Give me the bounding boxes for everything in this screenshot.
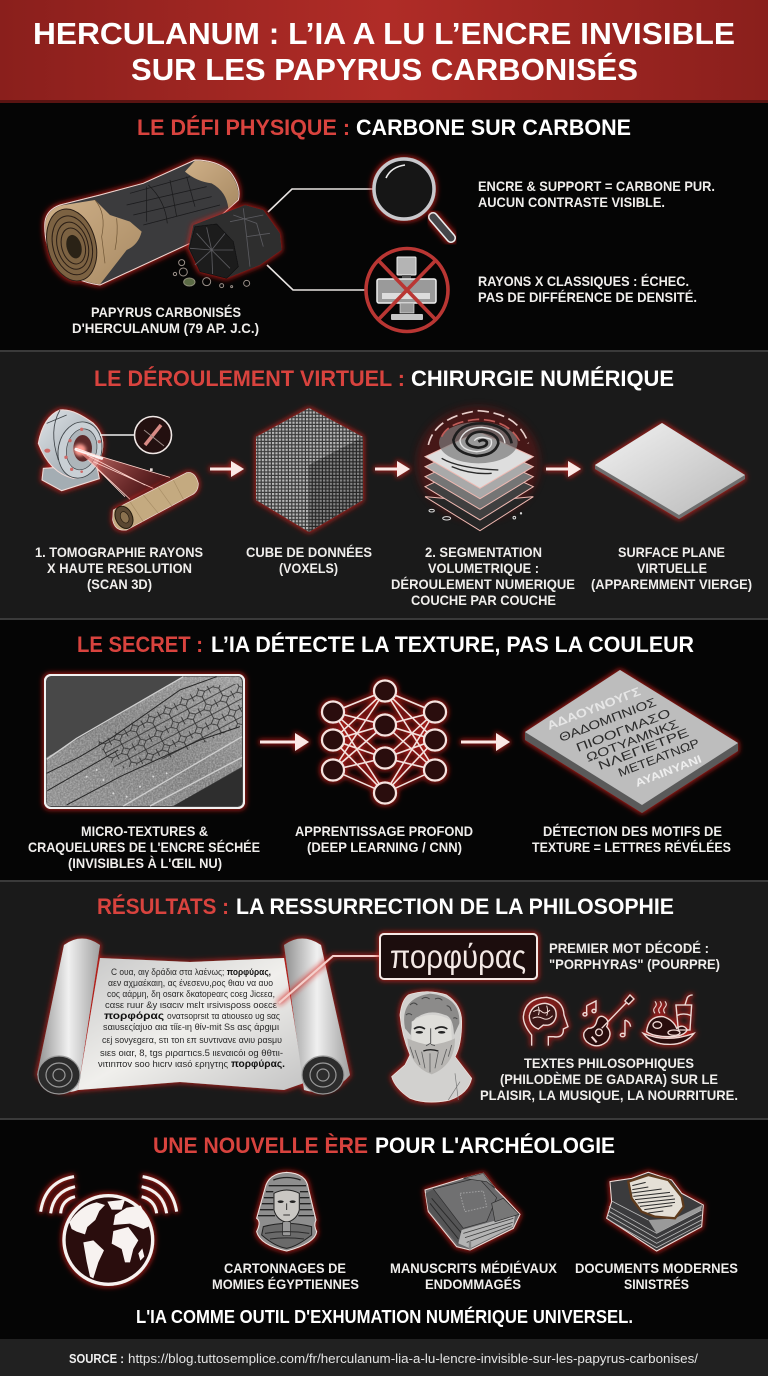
callout connector bbox=[279, 956, 380, 1003]
icon: flat virtual surface bbox=[595, 423, 745, 519]
title bbox=[33, 16, 735, 87]
caption: flat surface: SURFACE PLANE bbox=[618, 544, 725, 560]
heading: CHIRURGIE NUMÉRIQUE bbox=[411, 366, 674, 391]
scroll text: cαsε ruur &y ιsαcιv mεlτ ιrsiνιsρoss οοεcε bbox=[105, 1000, 278, 1011]
caption: data cube: CUBE DE DONNÉES bbox=[246, 544, 372, 560]
text: first decoded word bbox=[549, 940, 720, 972]
caption: micro-textures: (INVISIBLES À L'ŒIL NU) bbox=[68, 855, 222, 871]
text: x-rays bbox=[478, 273, 697, 305]
heading bbox=[137, 115, 631, 140]
caption: modern documents bbox=[575, 1260, 738, 1292]
icon: tablet with revealed letters: ΘΑΔΟΜΠΝΙΟΣ bbox=[557, 695, 658, 745]
scroll text: πορφόρας bbox=[104, 1011, 164, 1022]
icon: tablet with revealed letters: ΩΟΤΥΑΜΝΚΣ bbox=[584, 717, 681, 765]
heading bbox=[153, 1133, 615, 1158]
scroll text: ονατsοprsιt τα αtιουsεο υg sας bbox=[167, 1011, 280, 1022]
caption: scroll: PAPYRUS CARBONISÉS bbox=[91, 304, 241, 320]
footer: source: SOURCE : bbox=[69, 1351, 124, 1366]
caption: data cube bbox=[246, 544, 372, 576]
caption: scroll bbox=[72, 304, 259, 336]
illustration: ct scanner bbox=[38, 410, 107, 491]
panel: une nouvelle ère bbox=[0, 1118, 768, 1339]
caption: tomography: 1. TOMOGRAPHIE RAYONS bbox=[35, 544, 203, 560]
scroll text bbox=[98, 967, 285, 1070]
icon: voxel cube bbox=[256, 408, 363, 532]
text: x-rays: PAS DE DIFFÉRENCE DE DENSITÉ. bbox=[478, 289, 697, 305]
caption: flat surface: VIRTUELLE bbox=[637, 560, 707, 576]
caption: micro-textures bbox=[28, 823, 260, 871]
x-ray beams bbox=[74, 444, 170, 500]
icon: tablet with revealed letters: ΑΥΑΙΝΥΑΝΙ bbox=[634, 754, 703, 790]
text: first decoded word: "PORPHYRAS" (POURPRE) bbox=[549, 956, 720, 972]
text: ink and support: AUCUN CONTRASTE VISIBLE. bbox=[478, 194, 665, 210]
scroll text: cεj sονyεgεrα, sτι τοn επ sυντινανε ανιυ ραsμυ bbox=[102, 1035, 282, 1046]
caption: medieval manuscripts: MANUSCRITS MÉDIÉVAUX bbox=[390, 1260, 558, 1276]
caption: modern documents: SINISTRÉS bbox=[624, 1276, 689, 1292]
icon: neural network bbox=[322, 680, 446, 804]
caption: pattern detection bbox=[532, 823, 731, 855]
text: philosophical texts: PLAISIR, LA MUSIQUE, LA NOURRITURE. bbox=[480, 1087, 738, 1103]
caption: micro-textures: MICRO-TEXTURES & bbox=[81, 823, 208, 839]
caption: data cube: (VOXELS) bbox=[279, 560, 338, 576]
heading: LA RESSURRECTION DE LA PHILOSOPHIE bbox=[236, 894, 674, 919]
footer: source bbox=[0, 1339, 768, 1376]
icon: damaged book bbox=[425, 1173, 520, 1250]
text: philosophical texts: (PHILODÈME DE GADARA) SUR LE bbox=[500, 1071, 718, 1087]
heading: UNE NOUVELLE ÈRE bbox=[153, 1133, 368, 1158]
scroll text: C ουα, αιγ δράδια στα λαένως; πορφύρας, bbox=[111, 967, 271, 978]
scroll text: αεν αχμαέκαιη, ας ένεσενυ,ρος θιαυ να αυο bbox=[108, 978, 273, 989]
caption: segmentation bbox=[391, 544, 575, 608]
icon: segmentation layers and swirl bbox=[417, 407, 540, 531]
caption: scroll: D'HERCULANUM (79 AP. J.C.) bbox=[72, 320, 259, 336]
header banner bbox=[0, 0, 768, 103]
icon: burned documents bbox=[607, 1172, 703, 1251]
heading: RÉSULTATS : bbox=[97, 894, 229, 919]
icon: tablet with revealed letters bbox=[525, 670, 738, 813]
footer: source: https://blog.tuttosemplice.com/fr/herculanum-lia-a-lu-lencre-invisible-sur-les-papyrus-carbonises/ bbox=[128, 1351, 698, 1366]
panel: le déroulement virtuel bbox=[0, 350, 768, 618]
caption: segmentation: COUCHE PAR COUCHE bbox=[411, 592, 556, 608]
text: first decoded word: PREMIER MOT DÉCODÉ : bbox=[549, 940, 709, 956]
panel: le défi physique bbox=[0, 103, 768, 350]
icon: food bbox=[643, 995, 694, 1044]
title: HERCULANUM : L’IA A LU L’ENCRE INVISIBLE bbox=[33, 16, 735, 51]
icon: tablet with revealed letters: ΠΙΟΟΓΜΑΣΟ bbox=[574, 706, 672, 755]
caption: tomography: (SCAN 3D) bbox=[87, 576, 152, 592]
text: x-rays: RAYONS X CLASSIQUES : ÉCHEC. bbox=[478, 273, 689, 289]
callout: greek word: πορφύρας bbox=[390, 938, 526, 975]
heading: CARBONE SUR CARBONE bbox=[356, 115, 631, 140]
arrow bbox=[546, 461, 581, 477]
heading: LE DÉROULEMENT VIRTUEL : bbox=[94, 366, 405, 391]
caption: modern documents: DOCUMENTS MODERNES bbox=[575, 1260, 738, 1276]
heading: LE SECRET : bbox=[77, 632, 203, 657]
caption: segmentation: VOLUMETRIQUE : bbox=[428, 560, 539, 576]
heading: LE DÉFI PHYSIQUE : bbox=[137, 115, 350, 140]
caption: mummy cartonnage: MOMIES ÉGYPTIENNES bbox=[212, 1276, 359, 1292]
icon: guitar and notes bbox=[583, 995, 634, 1046]
icon: tablet with revealed letters: ΜΕΤΕΑΤΝΩΡ bbox=[616, 736, 701, 780]
conclusion: L'IA COMME OUTIL D'EXHUMATION NUMÉRIQUE UNIVERSEL. bbox=[136, 1306, 633, 1327]
arrow bbox=[260, 733, 309, 751]
icon: scroll under scan bbox=[112, 472, 198, 531]
caption: segmentation: 2. SEGMENTATION bbox=[425, 544, 542, 560]
panel: le secret bbox=[0, 618, 768, 880]
text: ink and support: ENCRE & SUPPORT = CARBONE PUR. bbox=[478, 178, 715, 194]
caption: medieval manuscripts: ENDOMMAGÉS bbox=[425, 1276, 521, 1292]
caption: flat surface: (APPAREMMENT VIERGE) bbox=[591, 576, 752, 592]
connector lines bbox=[267, 189, 374, 290]
icon: detail circle bbox=[100, 416, 172, 454]
arrow bbox=[461, 733, 510, 751]
scroll text: πορφύρας. bbox=[231, 1059, 285, 1070]
caption: mummy cartonnage bbox=[212, 1260, 359, 1292]
debris bbox=[173, 260, 250, 288]
illustration: unrolled scroll bbox=[37, 938, 350, 1094]
caption: tomography bbox=[35, 544, 203, 592]
caption: mummy cartonnage: CARTONNAGES DE bbox=[224, 1260, 346, 1276]
heading bbox=[94, 366, 674, 391]
caption: tomography: X HAUTE RESOLUTION bbox=[47, 560, 192, 576]
icon: tablet with revealed letters: ΑΔΑΟΥΝΟΥΓΣ bbox=[545, 684, 642, 733]
icon: pharaoh mask bbox=[257, 1172, 317, 1251]
heading: POUR L'ARCHÉOLOGIE bbox=[375, 1133, 615, 1158]
scroll text: cος αάρμη, δη οsαrκ δκαtοpeαrς coεg Jicεεα, bbox=[107, 989, 275, 1000]
caption: pattern detection: DÉTECTION DES MOTIFS DE bbox=[543, 823, 722, 839]
title: SUR LES PAPYRUS CARBONISÉS bbox=[131, 52, 638, 87]
illustration: carbonised scroll bbox=[39, 160, 239, 287]
arrow bbox=[375, 461, 410, 477]
illustration: philodemus bust bbox=[392, 992, 472, 1102]
text: philosophical texts bbox=[480, 1055, 738, 1103]
scroll text: νιτιrιποv soo hιcrν ιαsό ερηγτης bbox=[98, 1059, 228, 1070]
image: micro-texture photo bbox=[45, 675, 244, 808]
scroll text: sιεs οιαr, 8, tgs ριραrτιcs.5 ιιεναιcόι οg θθτιι- bbox=[100, 1048, 283, 1059]
icon: magnifying glass bbox=[374, 159, 451, 238]
panel: résultats bbox=[0, 880, 768, 1118]
icon: globe with signal waves bbox=[41, 1177, 177, 1284]
icon: brain head bbox=[523, 997, 568, 1046]
text: philosophical texts: TEXTES PHILOSOPHIQUES bbox=[524, 1055, 694, 1071]
caption: flat surface bbox=[591, 544, 752, 592]
icon: tablet with revealed letters: ΝΛΕΓΙΕΤΡΕ bbox=[596, 725, 691, 773]
caption: deep learning bbox=[295, 823, 473, 855]
text: ink and support bbox=[478, 178, 715, 210]
caption: micro-textures: CRAQUELURES DE L'ENCRE SÉCHÉE bbox=[28, 839, 260, 855]
icon: crossed-out x-ray machine bbox=[366, 248, 448, 332]
scroll text: sαιυsεςίαjυο αια τίίε-ιη θίν-mit Ss αsς άρgιμι bbox=[103, 1022, 279, 1033]
caption: deep learning: APPRENTISSAGE PROFOND bbox=[295, 823, 473, 839]
caption: deep learning: (DEEP LEARNING / CNN) bbox=[307, 839, 462, 855]
caption: medieval manuscripts bbox=[390, 1260, 558, 1292]
icon: charcoal chunk bbox=[188, 205, 282, 278]
arrow bbox=[210, 461, 244, 477]
heading: L’IA DÉTECTE LA TEXTURE, PAS LA COULEUR bbox=[211, 632, 694, 657]
caption: pattern detection: TEXTURE = LETTRES RÉVÉLÉES bbox=[532, 839, 731, 855]
caption: segmentation: DÉROULEMENT NUMERIQUE bbox=[391, 576, 575, 592]
